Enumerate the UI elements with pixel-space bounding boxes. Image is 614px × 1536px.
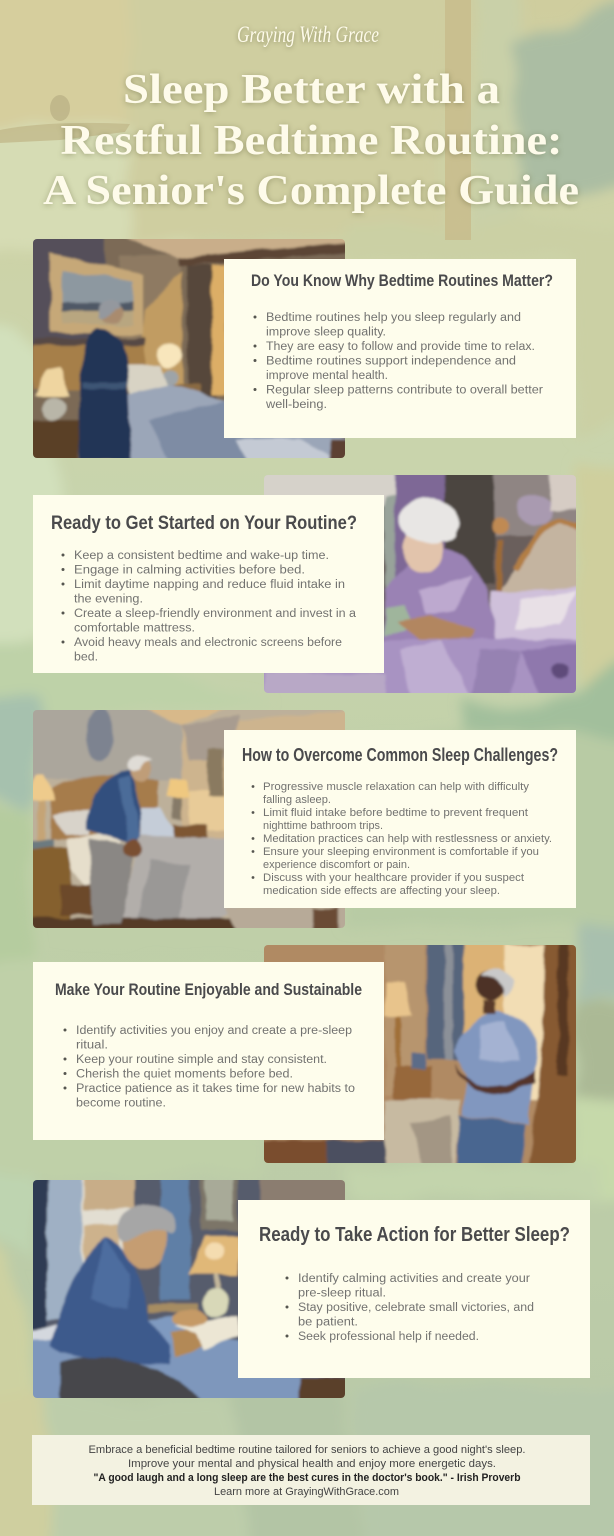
section 5: take action — [25, 1170, 590, 1405]
bullet list: Cherish the quiet moments before bed. — [76, 1068, 293, 1080]
panel: text card — [224, 259, 576, 438]
bullet list: the evening. — [74, 594, 143, 606]
bullet list: Discuss with your healthcare provider if you suspect — [263, 872, 524, 884]
heading: Do You Know Why Bedtime Routines Matter? — [251, 271, 553, 290]
bullet list: well-being. — [265, 399, 327, 411]
bullet list: Seek professional help if needed. — [298, 1331, 479, 1343]
bullet list: Limit fluid intake before bedtime to prevent frequent — [263, 807, 528, 819]
logo: Graying With Grace: Graying With Grace — [237, 22, 379, 47]
bullet list: Avoid heavy meals and electronic screens before — [74, 637, 342, 649]
bullet list: Ensure your sleeping environment is comfortable if you — [263, 846, 539, 858]
panel: text card — [238, 1200, 590, 1378]
panel: text card — [33, 962, 384, 1140]
bullet list: medication side effects are affecting your sleep. — [263, 885, 500, 897]
panel: text card — [33, 495, 384, 673]
bullet list: improve mental health. — [266, 370, 388, 382]
footer callout — [32, 1435, 590, 1505]
bullet list: Bedtime routines support independence and — [266, 356, 516, 368]
bullet list: Limit daytime napping and reduce fluid intake in — [74, 579, 345, 591]
bullet list: Stay positive, celebrate small victories, and — [298, 1302, 534, 1314]
title — [43, 67, 579, 214]
bullet list: Meditation practices can help with restlessness or anxiety. — [263, 833, 552, 845]
bullet list: experience discomfort or pain. — [263, 859, 410, 871]
bullet list: be patient. — [298, 1316, 358, 1328]
footer callout: Improve your mental and physical health and enjoy more energetic days. — [128, 1458, 496, 1470]
bullet list: improve sleep quality. — [266, 326, 386, 338]
image: woman in blue shirt in a warm bedroom — [264, 945, 576, 1163]
section 3: overcoming challenges — [25, 700, 576, 935]
bullet list: nighttime bathroom trips. — [263, 820, 383, 832]
title: Sleep Better with a — [123, 67, 500, 113]
bullet list: bed. — [74, 652, 98, 664]
heading: Ready to Get Started on Your Routine? — [51, 513, 357, 534]
bullet list — [252, 781, 552, 897]
bullet list: Identify calming activities and create your — [298, 1273, 530, 1285]
bullet list: ritual. — [76, 1040, 108, 1052]
section 2: getting started — [33, 475, 576, 693]
image: man in blue sweater leaning on bed — [33, 710, 345, 928]
section 1: why routines matter — [25, 230, 576, 465]
bullet list: comfortable mattress. — [74, 622, 195, 634]
bullet list: pre-sleep ritual. — [298, 1288, 386, 1300]
footer callout: "A good laugh and a long sleep are the best cures in the doctor's book." - Irish Proverb — [94, 1472, 521, 1484]
heading: Make Your Routine Enjoyable and Sustainable — [55, 980, 362, 999]
title: Restful Bedtime Routine: — [60, 118, 562, 164]
footer callout: Learn more at GrayingWithGrace.com — [214, 1486, 399, 1498]
image: man standing in a lamplit bedroom — [33, 239, 345, 458]
bullet list: Keep a consistent bedtime and wake-up time. — [74, 550, 329, 562]
bullet list — [62, 550, 357, 664]
bullet list: Practice patience as it takes time for new habits to — [76, 1083, 355, 1095]
image: man reading a book by lamplight — [33, 1180, 345, 1398]
bullet list — [254, 312, 543, 411]
title: A Senior's Complete Guide — [43, 168, 579, 214]
bullet list: become routine. — [76, 1098, 166, 1110]
bullet list: Keep your routine simple and stay consistent. — [76, 1054, 327, 1066]
bullet list: Engage in calming activities before bed. — [74, 564, 305, 576]
bullet list: Progressive muscle relaxation can help with difficulty — [263, 781, 530, 793]
bullet list — [286, 1273, 534, 1343]
image: woman reading in bed with lavender linens — [264, 475, 576, 693]
bullet list: Bedtime routines help you sleep regularly and — [266, 312, 521, 324]
bullet list: Regular sleep patterns contribute to overall better — [266, 384, 543, 396]
bullet list: Create a sleep-friendly environment and invest in a — [74, 608, 357, 620]
bullet list: Identify activities you enjoy and create a pre-sleep — [76, 1025, 352, 1037]
panel: text card — [224, 730, 576, 908]
bullet list — [64, 1025, 355, 1110]
bullet list: falling asleep. — [263, 794, 331, 806]
footer callout: Embrace a beneficial bedtime routine tailored for seniors to achieve a good night's sleep. — [88, 1444, 526, 1456]
section 4: enjoyable and sustainable — [33, 935, 585, 1170]
bullet list: They are easy to follow and provide time to relax. — [266, 341, 535, 353]
